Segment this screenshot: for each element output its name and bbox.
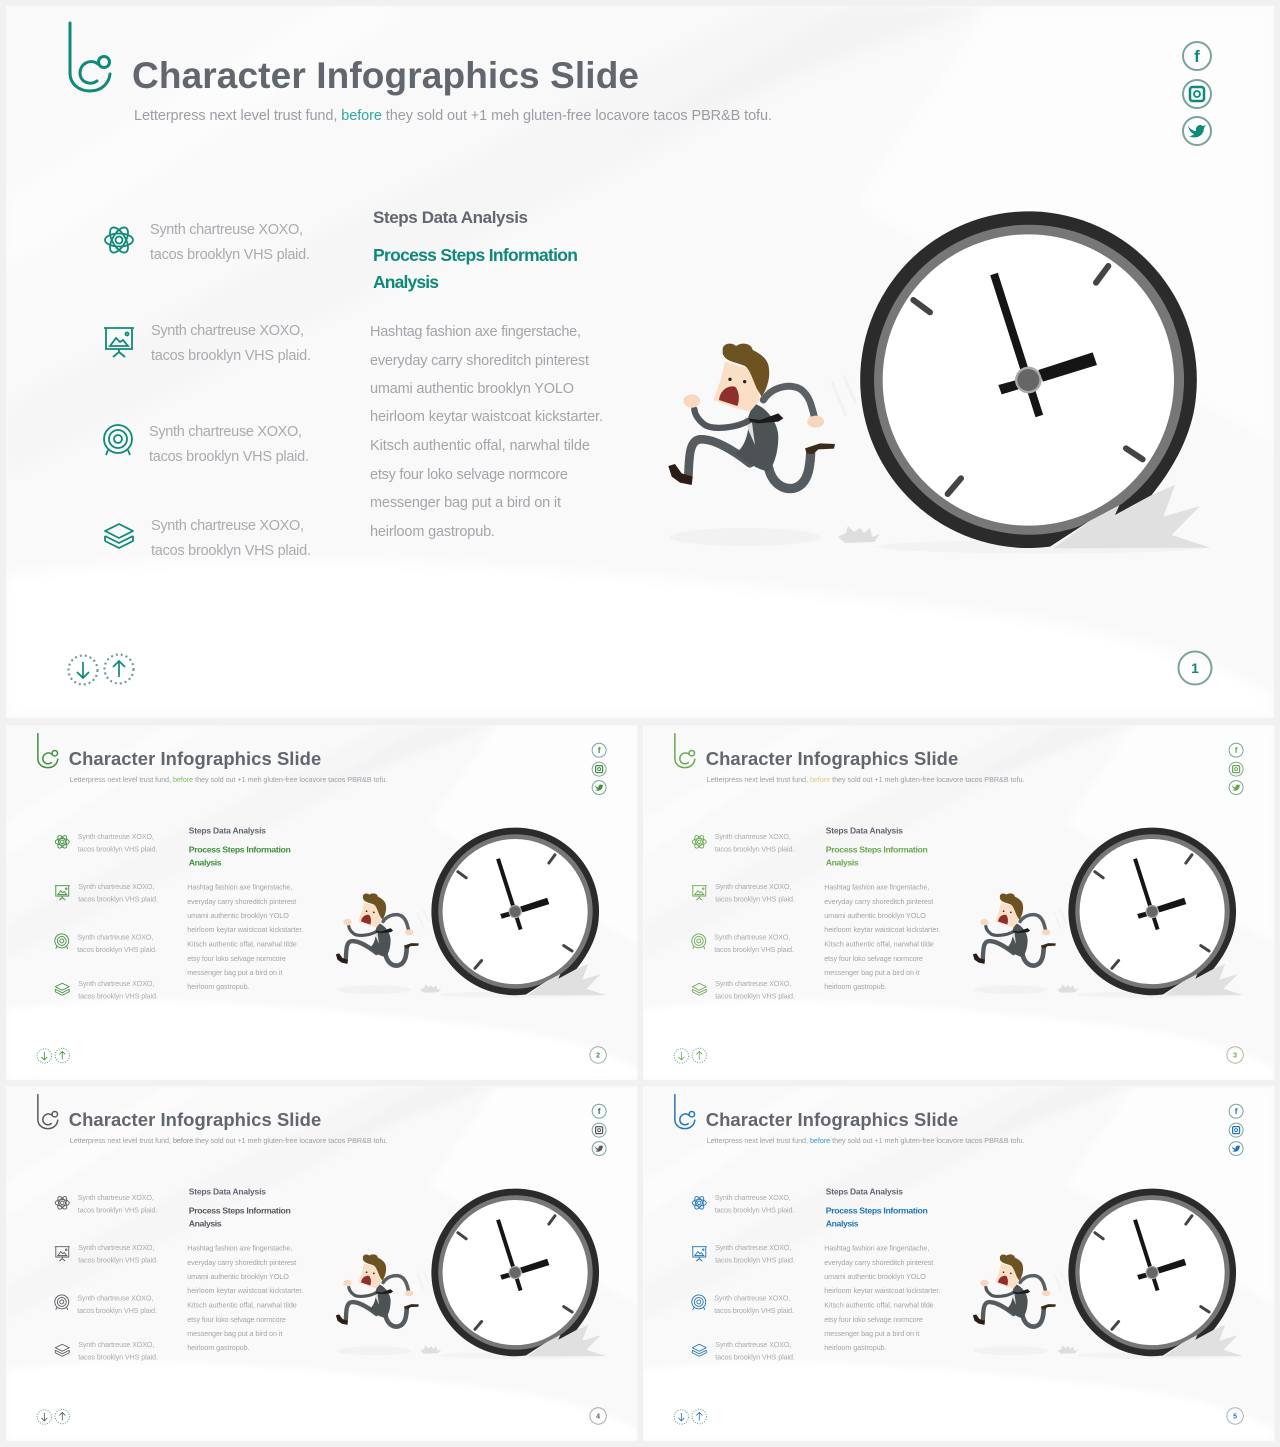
- logo: [675, 1095, 695, 1129]
- list item 2: tacos brooklyn VHS plaid.: [715, 895, 795, 904]
- body text: everyday carry shoreditch pinterest: [187, 897, 296, 906]
- icon: layers: [692, 1344, 706, 1356]
- list item 4: Synth chartreuse XOXO,: [715, 1340, 791, 1349]
- icon: target: [692, 934, 706, 949]
- ground shadows: [974, 1271, 1078, 1355]
- subheading: Process Steps Information: [826, 1205, 928, 1215]
- social icons: f: [1235, 745, 1238, 755]
- list item 1: Synth chartreuse XOXO,: [78, 832, 154, 841]
- body text: [187, 1244, 303, 1352]
- list item 1: [78, 1193, 157, 1214]
- body text: heirloom keytar waistcoat kickstarter.: [187, 1286, 303, 1295]
- subtitle: Letterpress next level trust fund, before they sold out +1 meh gluten-free locavore tacos PBR&B tofu.: [70, 1136, 387, 1145]
- list item 4: tacos brooklyn VHS plaid.: [151, 543, 311, 559]
- icon: target: [55, 934, 69, 949]
- list item 1: tacos brooklyn VHS plaid.: [715, 1205, 794, 1214]
- body text: Kitsch authentic offal, narwhal tilde: [187, 939, 297, 948]
- body text: heirloom gastropub.: [187, 982, 250, 991]
- list item 1: [715, 832, 794, 853]
- list item 3: Synth chartreuse XOXO,: [77, 932, 153, 941]
- list item 4: [715, 1340, 795, 1362]
- body text: messenger bag put a bird on it: [187, 1329, 282, 1338]
- social icons: [592, 1104, 606, 1156]
- social icons: f: [598, 745, 601, 755]
- list item 3: tacos brooklyn VHS plaid.: [77, 1306, 157, 1315]
- body text: heirloom gastropub.: [824, 1343, 887, 1352]
- list item 2: tacos brooklyn VHS plaid.: [78, 1256, 158, 1265]
- body text: etsy four loko selvage normcore: [187, 954, 286, 963]
- page number: [1178, 652, 1212, 684]
- heading: Steps Data Analysis: [189, 825, 266, 835]
- icon: layers: [55, 983, 69, 995]
- body text: [187, 883, 303, 991]
- body text: Kitsch authentic offal, narwhal tilde: [824, 939, 934, 948]
- subheading: Analysis: [826, 858, 859, 868]
- list item 2: [715, 1243, 795, 1265]
- logo: [70, 23, 110, 91]
- body text: messenger bag put a bird on it: [824, 1329, 919, 1338]
- title: Character Infographics Slide: [69, 1109, 321, 1130]
- page number: 4: [596, 1413, 600, 1420]
- list item 1: Synth chartreuse XOXO,: [78, 1193, 154, 1202]
- body text: [370, 324, 603, 540]
- body text: heirloom keytar waistcoat kickstarter.: [824, 1286, 940, 1295]
- subheading: Process Steps Information: [373, 245, 578, 265]
- list item 1: tacos brooklyn VHS plaid.: [150, 247, 310, 263]
- panel: slide 4: [6, 1086, 637, 1441]
- subheading: [373, 245, 578, 292]
- body text: umami authentic brooklyn YOLO: [824, 911, 926, 920]
- page number: 2: [596, 1052, 600, 1059]
- list item 4: tacos brooklyn VHS plaid.: [715, 992, 795, 1001]
- clock: [1068, 828, 1243, 998]
- page number: [1227, 1408, 1243, 1424]
- list item 4: Synth chartreuse XOXO,: [78, 979, 154, 988]
- body text: [824, 1244, 940, 1352]
- title: Character Infographics Slide: [706, 1109, 958, 1130]
- title: Character Infographics Slide: [706, 748, 958, 769]
- navigation arrows: [37, 1048, 69, 1063]
- icon: atom: [692, 834, 706, 849]
- body text: messenger bag put a bird on it: [187, 968, 282, 977]
- body text: everyday carry shoreditch pinterest: [824, 1258, 933, 1267]
- body text: Kitsch authentic offal, narwhal tilde: [187, 1300, 297, 1309]
- list item 1: Synth chartreuse XOXO,: [715, 1193, 791, 1202]
- list item 2: tacos brooklyn VHS plaid.: [151, 348, 311, 364]
- subheading: Process Steps Information: [189, 844, 291, 854]
- body text: heirloom gastropub.: [824, 982, 887, 991]
- body text: everyday carry shoreditch pinterest: [187, 1258, 296, 1267]
- heading: Steps Data Analysis: [826, 825, 903, 835]
- body text: everyday carry shoreditch pinterest: [824, 897, 933, 906]
- logo: [675, 734, 695, 768]
- icon: atom: [105, 225, 133, 255]
- subtitle: Letterpress next level trust fund, before they sold out +1 meh gluten-free locavore tacos PBR&B tofu.: [70, 775, 387, 784]
- body text: umami authentic brooklyn YOLO: [187, 1272, 289, 1281]
- list item 3: [77, 932, 157, 954]
- body text: etsy four loko selvage normcore: [370, 467, 568, 483]
- title: Character Infographics Slide: [132, 55, 639, 96]
- panel: slide 2: [6, 725, 637, 1080]
- page number: [1227, 1047, 1243, 1063]
- list item 1: [78, 832, 157, 853]
- body text: umami authentic brooklyn YOLO: [824, 1272, 926, 1281]
- list item 4: tacos brooklyn VHS plaid.: [78, 1353, 158, 1362]
- list item 2: [715, 882, 795, 904]
- subtitle: Letterpress next level trust fund, before they sold out +1 meh gluten-free locavore tacos PBR&B tofu.: [707, 1136, 1024, 1145]
- ground shadows: [974, 910, 1078, 994]
- list item 1: tacos brooklyn VHS plaid.: [715, 844, 794, 853]
- list item 4: [78, 1340, 158, 1362]
- list item 3: [149, 424, 309, 465]
- running man: [973, 893, 1056, 966]
- heading: Steps Data Analysis: [826, 1186, 903, 1196]
- body text: etsy four loko selvage normcore: [824, 954, 923, 963]
- list item 2: Synth chartreuse XOXO,: [715, 882, 791, 891]
- clock: [860, 211, 1210, 553]
- icon: layers: [692, 983, 706, 995]
- social icons: f: [1235, 1106, 1238, 1116]
- social icons: [1229, 743, 1243, 795]
- navigation arrows: [674, 1409, 706, 1424]
- page number: 1: [1191, 660, 1199, 676]
- body text: Hashtag fashion axe fingerstache,: [824, 883, 929, 892]
- body text: heirloom gastropub.: [370, 524, 495, 540]
- list item 4: tacos brooklyn VHS plaid.: [715, 1353, 795, 1362]
- clock: [1068, 1189, 1243, 1359]
- page number: 5: [1233, 1413, 1237, 1420]
- list item 1: tacos brooklyn VHS plaid.: [78, 844, 157, 853]
- ground shadows: [337, 1271, 441, 1355]
- body text: umami authentic brooklyn YOLO: [187, 911, 289, 920]
- panel: slide 3: [643, 725, 1274, 1080]
- running man: [336, 893, 419, 966]
- list item 3: tacos brooklyn VHS plaid.: [77, 945, 157, 954]
- list item 2: [78, 882, 158, 904]
- ground shadows: [337, 910, 441, 994]
- running man: [973, 1254, 1056, 1327]
- list item 3: tacos brooklyn VHS plaid.: [714, 1306, 794, 1315]
- list item 3: Synth chartreuse XOXO,: [77, 1293, 153, 1302]
- subheading: Analysis: [189, 1219, 222, 1229]
- icon: atom: [55, 834, 69, 849]
- body text: heirloom keytar waistcoat kickstarter.: [370, 409, 603, 425]
- subheading: Analysis: [189, 858, 222, 868]
- heading: Steps Data Analysis: [189, 1186, 266, 1196]
- list item 4: Synth chartreuse XOXO,: [78, 1340, 154, 1349]
- panel: slide 5: [643, 1086, 1274, 1441]
- list item 3: tacos brooklyn VHS plaid.: [149, 449, 309, 465]
- list item 3: Synth chartreuse XOXO,: [714, 1293, 790, 1302]
- body text: [824, 883, 940, 991]
- list item 4: Synth chartreuse XOXO,: [715, 979, 791, 988]
- body text: heirloom gastropub.: [187, 1343, 250, 1352]
- icon: presentation board: [104, 328, 134, 357]
- list item 4: [151, 518, 311, 559]
- list item 3: Synth chartreuse XOXO,: [149, 424, 302, 440]
- navigation arrows: [674, 1048, 706, 1063]
- body text: messenger bag put a bird on it: [824, 968, 919, 977]
- icon: presentation board: [55, 1247, 70, 1261]
- icon: target: [55, 1295, 69, 1310]
- panel: main slide: [6, 6, 1274, 718]
- list item 1: Synth chartreuse XOXO,: [150, 222, 303, 238]
- list item 3: tacos brooklyn VHS plaid.: [714, 945, 794, 954]
- body text: Kitsch authentic offal, narwhal tilde: [824, 1300, 934, 1309]
- body text: Kitsch authentic offal, narwhal tilde: [370, 438, 590, 454]
- body text: Hashtag fashion axe fingerstache,: [187, 1244, 292, 1253]
- subheading: Analysis: [826, 1219, 859, 1229]
- social icons: [1183, 42, 1211, 145]
- list item 2: [151, 323, 311, 364]
- subheading: Process Steps Information: [826, 844, 928, 854]
- body text: everyday carry shoreditch pinterest: [370, 353, 589, 369]
- body text: etsy four loko selvage normcore: [824, 1315, 923, 1324]
- body text: Hashtag fashion axe fingerstache,: [370, 324, 581, 340]
- heading: Steps Data Analysis: [373, 208, 528, 227]
- list item 2: Synth chartreuse XOXO,: [715, 1243, 791, 1252]
- list item 2: tacos brooklyn VHS plaid.: [715, 1256, 795, 1265]
- list item 1: [150, 222, 310, 263]
- page number: 3: [1233, 1052, 1237, 1059]
- page number: [590, 1408, 606, 1424]
- social icons: f: [1194, 47, 1200, 66]
- social icons: [592, 743, 606, 795]
- subtitle: Letterpress next level trust fund, before they sold out +1 meh gluten-free locavore tacos PBR&B tofu.: [134, 108, 772, 124]
- icon: layers: [55, 1344, 69, 1356]
- body text: Hashtag fashion axe fingerstache,: [824, 1244, 929, 1253]
- list item 3: [714, 932, 794, 954]
- subheading: Process Steps Information: [189, 1205, 291, 1215]
- social icons: f: [598, 1106, 601, 1116]
- list item 4: [715, 979, 795, 1001]
- list item 1: tacos brooklyn VHS plaid.: [78, 1205, 157, 1214]
- body text: messenger bag put a bird on it: [370, 495, 561, 511]
- subheading: Analysis: [373, 272, 439, 292]
- subtitle: Letterpress next level trust fund, before they sold out +1 meh gluten-free locavore tacos PBR&B tofu.: [707, 775, 1024, 784]
- list item 4: Synth chartreuse XOXO,: [151, 518, 304, 534]
- ground shadows: [670, 376, 880, 546]
- list item 2: [78, 1243, 158, 1265]
- icon: atom: [692, 1195, 706, 1210]
- subheading: [826, 1205, 928, 1229]
- body text: umami authentic brooklyn YOLO: [370, 381, 574, 397]
- icon: presentation board: [692, 886, 707, 900]
- list item 3: Synth chartreuse XOXO,: [714, 932, 790, 941]
- icon: target: [692, 1295, 706, 1310]
- icon: target: [104, 425, 132, 455]
- icon: atom: [55, 1195, 69, 1210]
- list item 2: Synth chartreuse XOXO,: [78, 882, 154, 891]
- body text: etsy four loko selvage normcore: [187, 1315, 286, 1324]
- list item 1: Synth chartreuse XOXO,: [715, 832, 791, 841]
- subheading: [189, 1205, 291, 1229]
- clock: [431, 1189, 606, 1359]
- running man: [668, 344, 835, 489]
- list item 4: tacos brooklyn VHS plaid.: [78, 992, 158, 1001]
- list item 1: [715, 1193, 794, 1214]
- navigation arrows: [68, 654, 134, 684]
- list item 2: Synth chartreuse XOXO,: [78, 1243, 154, 1252]
- list item 2: tacos brooklyn VHS plaid.: [78, 895, 158, 904]
- title: Character Infographics Slide: [69, 748, 321, 769]
- clock: [431, 828, 606, 998]
- list item 4: [78, 979, 158, 1001]
- subheading: [189, 844, 291, 868]
- list item 3: [714, 1293, 794, 1315]
- list item 2: Synth chartreuse XOXO,: [151, 323, 304, 339]
- navigation arrows: [37, 1409, 69, 1424]
- icon: presentation board: [55, 886, 70, 900]
- subheading: [826, 844, 928, 868]
- running man: [336, 1254, 419, 1327]
- icon: presentation board: [692, 1247, 707, 1261]
- logo: [38, 734, 58, 768]
- list item 3: [77, 1293, 157, 1315]
- icon: layers: [105, 524, 133, 548]
- social icons: [1229, 1104, 1243, 1156]
- body text: Hashtag fashion axe fingerstache,: [187, 883, 292, 892]
- body text: heirloom keytar waistcoat kickstarter.: [187, 925, 303, 934]
- logo: [38, 1095, 58, 1129]
- page number: [590, 1047, 606, 1063]
- body text: heirloom keytar waistcoat kickstarter.: [824, 925, 940, 934]
